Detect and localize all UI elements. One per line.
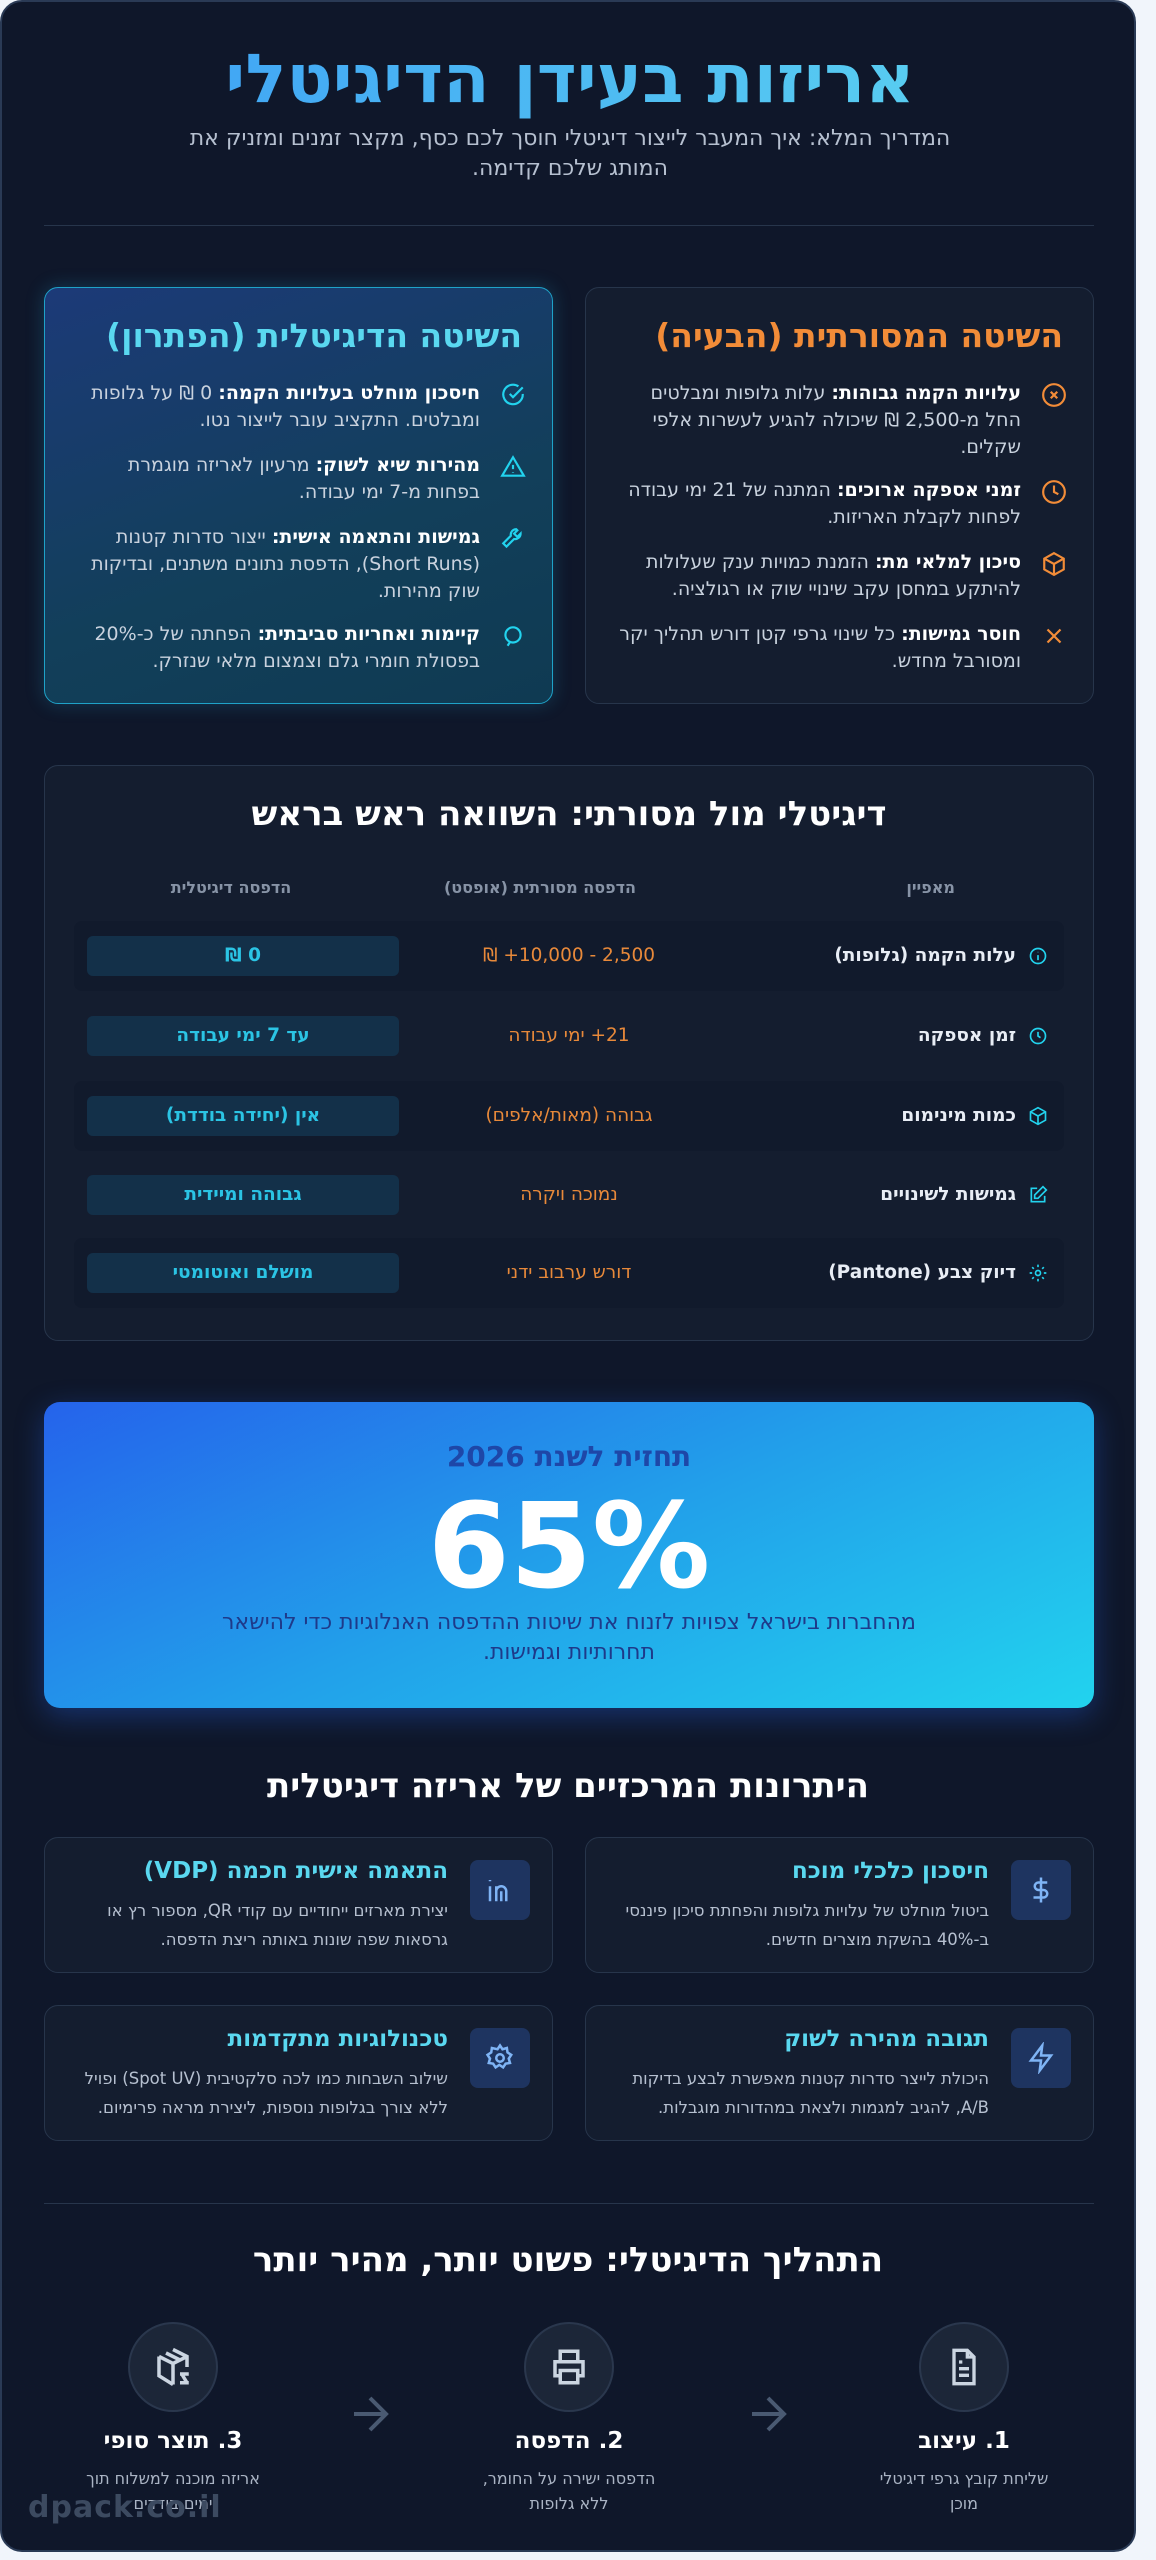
table row: flexibility: נמוכה ויקרה (520, 1184, 618, 1205)
card: advanced tech: שילוב השבחות כמו לכה סלקטיבית (Spot UV) ופויל ללא צורך בגלופות נוספות, ליצירת מראה פרימיום. (85, 2069, 448, 2117)
table row: flexibility: גבוהה ומיידית (184, 1184, 302, 1205)
stat description: מהחברות בישראל צפויות לזנוח את שיטות ההדפסה האנלוגיות כדי להישאר תחרותיות וגמישות. (222, 1610, 916, 1665)
icon: document (919, 2322, 1009, 2412)
step 1: design: מוכן (950, 2494, 978, 2513)
step 1: design: 1. עיצוב (918, 2428, 1010, 2454)
card: fast market response: תגובה מהירה לשוק (784, 2026, 989, 2052)
step 3: final product (86, 2322, 260, 2513)
item: flexibility: גמישות והתאמה אישית: ייצור סדרות קטנות (Short Runs), הדפסת נתונים משתנים, ובדיקות שוק מהירות. (91, 526, 480, 602)
subtitle: המדריך המלא: איך המעבר לייצור דיגיטלי חוסך לכם כסף, מקצר זמנים ומזניק את המותג שלכם קדימה. (190, 126, 950, 181)
item: sustainability: קיימות ואחריות סביבתית: הפחתה של כ-20% בפסולת חומרי גלם וצמצום מלאי שנזרק. (94, 623, 480, 672)
panel: traditional method (585, 287, 1094, 704)
table row: color accuracy: דיוק צבע (Pantone) (828, 1262, 1016, 1283)
stat callout: 65% (44, 1402, 1094, 1708)
heading: traditional: השיטה המסורתית (הבעיה) (655, 316, 1063, 355)
card: VDP: יצירת מארזים ייחודיים עם קודי QR, מספור רץ או גרסאות שפה שונות באותה ריצת הדפסה. (107, 1901, 448, 1949)
card: fast market response (585, 2005, 1094, 2141)
card: advanced tech: טכנולוגיות מתקדמות (228, 2026, 448, 2052)
icon: printer (524, 2322, 614, 2412)
table row: minimum quantity: כמות מינימום (901, 1105, 1016, 1126)
heading: advantages: היתרונות המרכזיים של אריזה דיגיטלית (267, 1766, 869, 1806)
panel: digital method (44, 287, 553, 704)
item: lack of flexibility: חוסר גמישות: כל שינוי גרפי קטן דורש תהליך יקר ומסורבל מחדש. (619, 623, 1021, 672)
arrow 2 (354, 2396, 389, 2432)
step 2: print (483, 2322, 655, 2513)
arrow 1 (752, 2396, 787, 2432)
table row: setup cost: 0 ₪ (225, 945, 261, 966)
panel: comparison table (44, 765, 1094, 1341)
table row: flexibility (87, 1175, 1048, 1215)
table headers: הדפסה דיגיטלית (171, 878, 291, 897)
item: zero setup: חיסכון מוחלט בעלויות הקמה: 0 ₪ על גלופות ומבלטים. התקציב עובר לייצור נטו. (91, 382, 480, 431)
step 3: final product: 3. תוצר סופי (104, 2428, 242, 2454)
icon: personalization (470, 1860, 530, 1920)
title: אריזות בעידן הדיגיטלי (225, 40, 915, 119)
stat number: 65% (428, 1477, 710, 1615)
icon: lightning (1011, 2028, 1071, 2088)
table headers: הדפסה מסורתית (אופסט) (444, 878, 636, 897)
table row: minimum quantity: אין (יחידה בודדת) (166, 1105, 320, 1126)
item: long lead times: זמני אספקה ארוכים: המתנה של 21 ימי עבודה לפחות לקבלת האריזות. (628, 479, 1021, 528)
card: financial savings (585, 1837, 1094, 1973)
card: VDP: התאמה אישית חכמה (VDP) (144, 1858, 448, 1884)
step 2: print: ללא גלופות (530, 2494, 608, 2513)
item: dead stock risk: סיכון למלאי מת: הזמנת כמויות ענק שעלולות להיתקע במחסן עקב שינויי שוק או רגולציה. (646, 551, 1021, 600)
watermark: dpack.co.il (28, 2490, 222, 2525)
icon: gear (470, 2028, 530, 2088)
table row: setup cost: 2,500 - 10,000+ ₪ (483, 945, 655, 966)
table row: color accuracy: מושלם ואוטומטי (173, 1262, 313, 1283)
table row: lead time: 21+ ימי עבודה (508, 1025, 630, 1046)
table headers (170, 878, 955, 897)
table row: color accuracy: דורש ערבוב ידני (507, 1262, 631, 1283)
table headers: מאפיין (906, 878, 955, 897)
step 1: design: שליחת קובץ גרפי דיגיטלי (880, 2469, 1048, 2488)
icon: dollar (1011, 1860, 1071, 1920)
card: advanced tech (44, 2005, 553, 2141)
item: high setup costs: עלויות הקמה גבוהות: עלות גלופות ומבלטים החל מ-2,500 ₪ שיכולה להגיע לעשרות אלפי שקלים. (651, 382, 1021, 458)
table row: color accuracy (74, 1238, 1064, 1308)
step 3: final product: ימים בודדים (134, 2494, 212, 2513)
card: fast market response: היכולת לייצר סדרות קטנות מאפשרת לבצע בדיקות A/B, להגיב למגמות ולצאת במהדורות מוגבלות. (632, 2069, 989, 2117)
step 3: final product: אריזה מוכנה למשלוח תוך (86, 2469, 260, 2488)
table row: flexibility: גמישות לשינויים (880, 1184, 1016, 1205)
card: financial savings: חיסכון כלכלי מוכח (792, 1858, 989, 1884)
table row: setup cost: עלות הקמה (גלופות) (834, 945, 1016, 966)
table row: lead time: עד 7 ימי עבודה (176, 1025, 310, 1046)
table row: minimum quantity: גבוהה (מאות/אלפים) (485, 1105, 653, 1126)
table row: minimum quantity (74, 1081, 1064, 1151)
item: speed to market: מהירות שיא לשוק: מרעיון לאריזה מוגמרת בפחות מ-7 ימי עבודה. (128, 454, 480, 503)
card: financial savings: ביטול מוחלט של עלויות גלופות והפחתת סיכון פיננסי ב-40% בהשקת מוצרים חדשים. (626, 1901, 989, 1949)
step 2: print: 2. הדפסה (515, 2428, 623, 2454)
table row: setup cost (74, 921, 1064, 991)
table row: lead time: זמן אספקה (918, 1025, 1016, 1046)
table row: lead time (87, 1016, 1046, 1056)
heading: process: התהליך הדיגיטלי: פשוט יותר, מהיר יותר (253, 2240, 883, 2280)
step 1: design (880, 2322, 1048, 2513)
step 2: print: הדפסה ישירה על החומר, (483, 2469, 655, 2488)
stat label: תחזית לשנת 2026 (447, 1440, 691, 1473)
icon: package (128, 2322, 218, 2412)
heading: comparison: דיגיטלי מול מסורתי: השוואה ראש בראש (252, 794, 886, 834)
card: VDP (44, 1837, 553, 1973)
heading: digital: השיטה הדיגיטלית (הפתרון) (106, 316, 522, 355)
title (2, 32, 1138, 128)
